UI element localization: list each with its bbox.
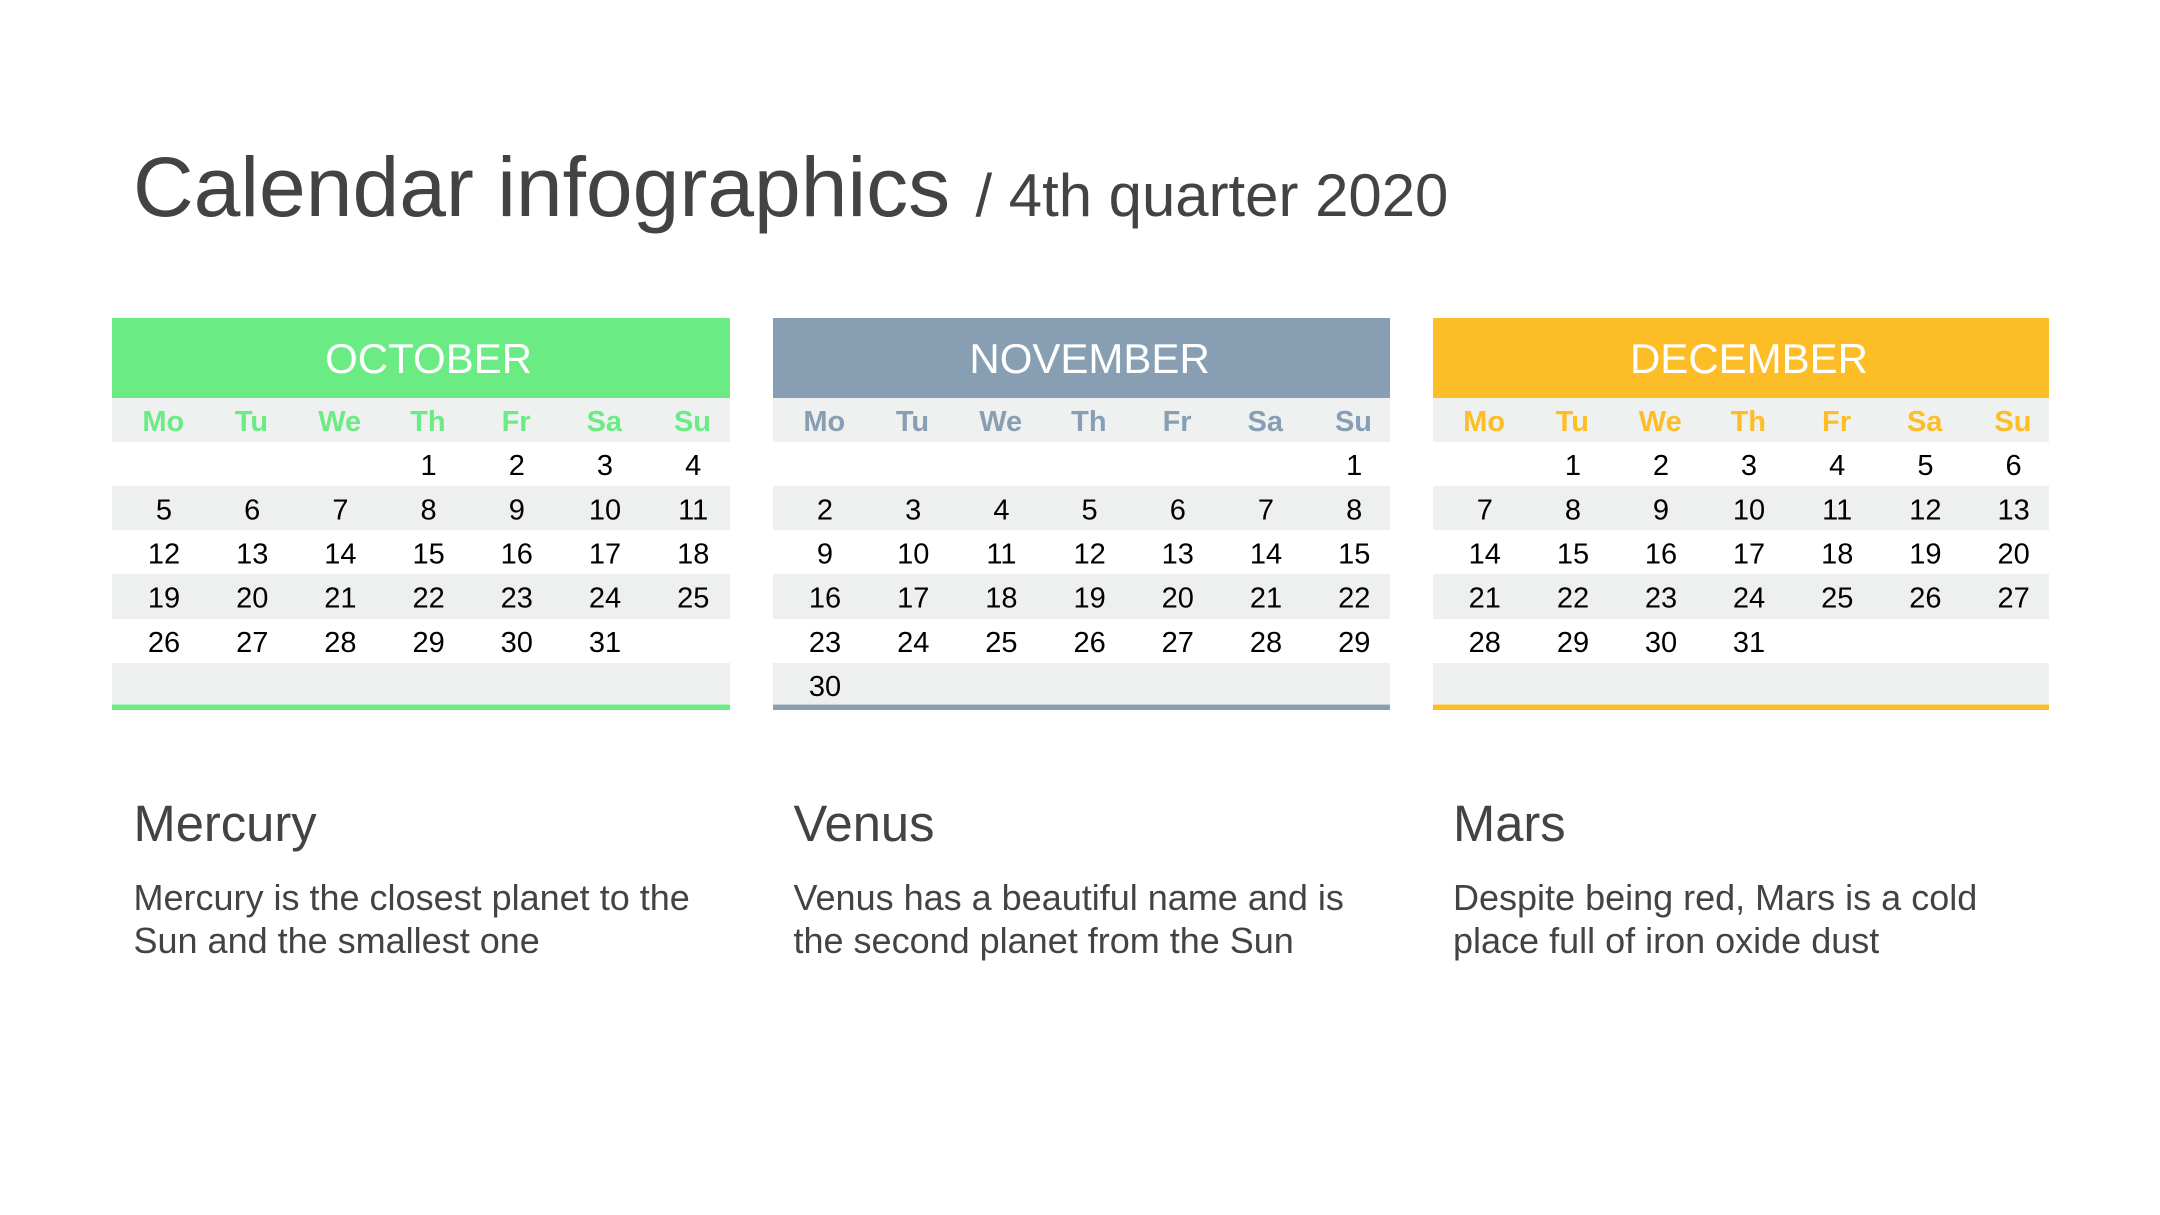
november dates: 25 (985, 627, 1018, 659)
text block: venus: the second planet from the Sun (794, 920, 1294, 961)
december dates: 11 (1822, 494, 1852, 526)
text block: mercury: Mercury is the closest planet to the (134, 877, 690, 918)
october dates: 23 (501, 583, 533, 615)
november dates: 9 (817, 538, 833, 570)
december dates: 19 (1909, 538, 1942, 570)
text block: venus: Venus has a beautiful name and is (794, 877, 1344, 918)
text block: mars: place full of iron oxide dust (1453, 920, 1879, 961)
october weekdays: Th (410, 406, 446, 438)
october dates: 17 (589, 538, 621, 570)
december dates: 23 (1645, 583, 1677, 615)
october weekdays: Sa (587, 406, 623, 438)
november dates: 23 (809, 627, 841, 659)
december weekdays: Mo (1463, 406, 1505, 438)
november dates: 13 (1162, 538, 1194, 570)
december dates: 28 (1469, 627, 1501, 659)
december dates: 4 (1829, 450, 1845, 482)
november dates: 28 (1250, 627, 1282, 659)
november dates: 6 (1170, 494, 1186, 526)
october dates: 8 (421, 494, 437, 526)
december header: DECEMBER (1630, 335, 1868, 382)
panel: october calendar (112, 318, 730, 710)
december dates: 20 (1997, 538, 2030, 570)
december dates (1433, 450, 2049, 710)
october dates: 19 (148, 583, 180, 615)
december dates: 29 (1557, 627, 1589, 659)
october dates: 6 (244, 494, 260, 526)
november weekdays: We (979, 406, 1022, 438)
october dates: 5 (156, 494, 172, 526)
october dates: 21 (324, 583, 357, 615)
title (133, 140, 1448, 234)
panel: november calendar (773, 318, 1390, 710)
december dates: 31 (1733, 627, 1765, 659)
november weekdays: Sa (1248, 406, 1284, 438)
december dates: 8 (1565, 494, 1581, 526)
text block: venus (794, 795, 1344, 961)
december dates: 18 (1821, 538, 1853, 570)
december dates: 13 (1997, 494, 2030, 526)
october weekdays: Tu (235, 406, 268, 438)
december dates: 26 (1909, 583, 1942, 615)
november weekdays: Mo (803, 406, 845, 438)
november dates: 20 (1162, 583, 1194, 615)
november header (773, 318, 1390, 398)
december weekdays: We (1639, 406, 1682, 438)
december dates: 6 (2006, 450, 2022, 482)
november dates (773, 450, 1390, 710)
december dates: 9 (1653, 494, 1669, 526)
october dates: 10 (589, 494, 621, 526)
october dates: 24 (589, 583, 621, 615)
october dates: 12 (148, 538, 180, 570)
october weekdays: Mo (142, 406, 184, 438)
text block: mars: Mars (1453, 795, 1566, 852)
november dates: 1 (1346, 450, 1362, 482)
december dates: 14 (1469, 538, 1501, 570)
october dates: 26 (148, 627, 180, 659)
november dates: 30 (809, 671, 841, 703)
november weekdays: Tu (896, 406, 929, 438)
november dates: 19 (1073, 583, 1106, 615)
december dates: 15 (1557, 538, 1589, 570)
panel: december calendar (1433, 318, 2049, 710)
december dates: 12 (1909, 494, 1942, 526)
october dates: 11 (678, 494, 708, 526)
november dates: 21 (1250, 583, 1282, 615)
text block: mercury (134, 795, 690, 961)
december dates: 1 (1565, 450, 1581, 482)
december dates: 5 (1917, 450, 1933, 482)
october dates: 9 (509, 494, 525, 526)
december dates: 7 (1477, 494, 1493, 526)
december dates: 30 (1645, 627, 1677, 659)
text block: mars (1453, 795, 1977, 961)
november weekdays: Fr (1163, 406, 1192, 438)
november dates: 26 (1073, 627, 1106, 659)
november dates: 5 (1082, 494, 1098, 526)
october dates: 1 (421, 450, 437, 482)
december dates: 17 (1733, 538, 1765, 570)
october dates: 15 (412, 538, 445, 570)
november dates: 27 (1162, 627, 1194, 659)
november dates: 4 (993, 494, 1009, 526)
december weekdays (1433, 398, 2049, 442)
november dates: 18 (985, 583, 1018, 615)
december weekdays: Th (1731, 406, 1766, 438)
october dates: 28 (324, 627, 357, 659)
november dates: 14 (1250, 538, 1282, 570)
november dates: 10 (897, 538, 929, 570)
october header: OCTOBER (325, 335, 532, 382)
october dates: 25 (677, 583, 709, 615)
october dates: 29 (412, 627, 445, 659)
november dates: 24 (897, 627, 929, 659)
december dates: 10 (1733, 494, 1765, 526)
october dates: 13 (236, 538, 268, 570)
november dates: 12 (1073, 538, 1106, 570)
october header (112, 318, 730, 398)
text block: mars: Despite being red, Mars is a cold (1453, 877, 1977, 918)
october dates: 20 (236, 583, 268, 615)
december weekdays: Tu (1556, 406, 1589, 438)
december dates: 27 (1997, 583, 2030, 615)
october dates: 31 (589, 627, 621, 659)
december dates: 22 (1557, 583, 1589, 615)
november dates: 16 (809, 583, 841, 615)
november dates: 29 (1338, 627, 1370, 659)
october dates: 7 (332, 494, 348, 526)
december header (1433, 318, 2049, 398)
october dates: 3 (597, 450, 613, 482)
december dates: 25 (1821, 583, 1853, 615)
november weekdays: Th (1071, 406, 1107, 438)
november dates: 3 (905, 494, 921, 526)
december dates: 3 (1741, 450, 1757, 482)
text block: mercury: Mercury (134, 795, 317, 852)
november weekdays (773, 398, 1390, 442)
december dates: 2 (1653, 450, 1669, 482)
october dates: 16 (501, 538, 533, 570)
october weekdays: We (318, 406, 361, 438)
october weekdays: Su (674, 406, 711, 438)
december weekdays: Su (1994, 406, 2031, 438)
december dates: 16 (1645, 538, 1677, 570)
october dates (112, 450, 730, 710)
title: / 4th quarter 2020 (976, 162, 1448, 229)
october weekdays (112, 398, 730, 442)
october dates: 4 (685, 450, 701, 482)
december dates: 24 (1733, 583, 1765, 615)
october dates: 2 (509, 450, 525, 482)
october weekdays: Fr (502, 406, 531, 438)
october dates: 22 (412, 583, 445, 615)
text block: mercury: Sun and the smallest one (134, 920, 540, 961)
december dates: 21 (1469, 583, 1501, 615)
november dates: 15 (1338, 538, 1370, 570)
october dates: 18 (677, 538, 709, 570)
november header: NOVEMBER (969, 335, 1210, 382)
october dates: 27 (236, 627, 268, 659)
text block: venus: Venus (794, 795, 934, 852)
november dates: 22 (1338, 583, 1370, 615)
december weekdays: Sa (1907, 406, 1943, 438)
title: Calendar infographics (133, 140, 950, 234)
november dates: 2 (817, 494, 833, 526)
november dates: 17 (897, 583, 929, 615)
december weekdays: Fr (1822, 406, 1851, 438)
november dates: 11 (986, 538, 1016, 570)
october dates: 30 (501, 627, 533, 659)
november dates: 7 (1258, 494, 1274, 526)
november weekdays: Su (1335, 406, 1372, 438)
november dates: 8 (1346, 494, 1362, 526)
october dates: 14 (324, 538, 357, 570)
